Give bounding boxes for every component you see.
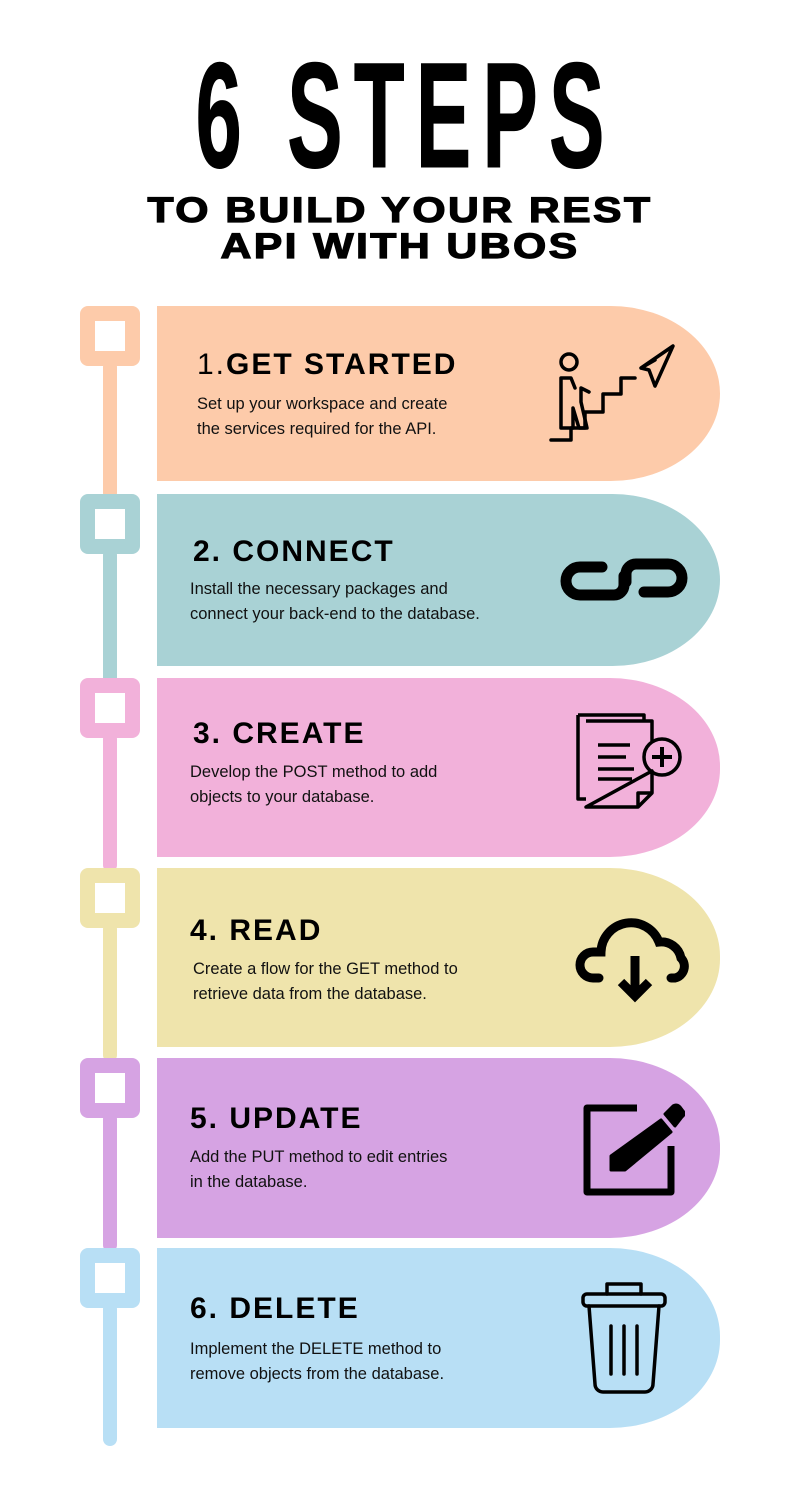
- text 6: [190, 1340, 444, 1382]
- icon: stairs: [549, 344, 675, 442]
- text 5: [190, 1148, 447, 1190]
- text 6: remove objects from the database.: [190, 1364, 444, 1382]
- heading 4: 4. READ: [190, 914, 322, 947]
- text 4: Create a flow for the GET method to: [193, 960, 458, 978]
- panel: step 4: [157, 868, 720, 1047]
- text 6: Implement the DELETE method to: [190, 1340, 441, 1358]
- panel: step 6: [157, 1248, 720, 1428]
- text 1: the services required for the API.: [197, 420, 436, 438]
- icon: cloud download: [576, 918, 689, 1002]
- text 3: [190, 763, 437, 806]
- text 2: connect your back-end to the database.: [190, 604, 480, 622]
- subtitle: [147, 191, 652, 266]
- text 5: Add the PUT method to edit entries: [190, 1148, 447, 1166]
- heading 3: 3. CREATE: [193, 717, 365, 750]
- text 4: [193, 960, 458, 1002]
- text 3: objects to your database.: [190, 788, 374, 806]
- text 4: retrieve data from the database.: [193, 984, 427, 1002]
- heading 1: 1.GET STARTED: [197, 348, 457, 381]
- text 3: Develop the POST method to add: [190, 763, 437, 781]
- icon: document plus: [576, 713, 682, 809]
- subtitle: TO BUILD YOUR REST: [147, 191, 652, 230]
- heading 6: 6. DELETE: [190, 1292, 360, 1325]
- panel: step 1: [157, 306, 720, 481]
- icon: link: [560, 558, 688, 600]
- text 1: Set up your workspace and create: [197, 395, 447, 413]
- text 2: Install the necessary packages and: [190, 580, 448, 598]
- panel: step 2: [157, 494, 720, 666]
- title: 6 STEPS: [195, 31, 616, 199]
- subtitle: API WITH UBOS: [220, 227, 580, 266]
- timeline: [80, 306, 140, 1446]
- heading 2: 2. CONNECT: [193, 535, 395, 568]
- heading 5: 5. UPDATE: [190, 1102, 362, 1135]
- text 1: [197, 395, 447, 438]
- text 5: in the database.: [190, 1172, 307, 1190]
- icon: trash: [581, 1282, 667, 1394]
- panel: step 3: [157, 678, 720, 857]
- icon: edit: [584, 1104, 685, 1196]
- panel: step 5: [157, 1058, 720, 1238]
- text 2: [190, 580, 480, 622]
